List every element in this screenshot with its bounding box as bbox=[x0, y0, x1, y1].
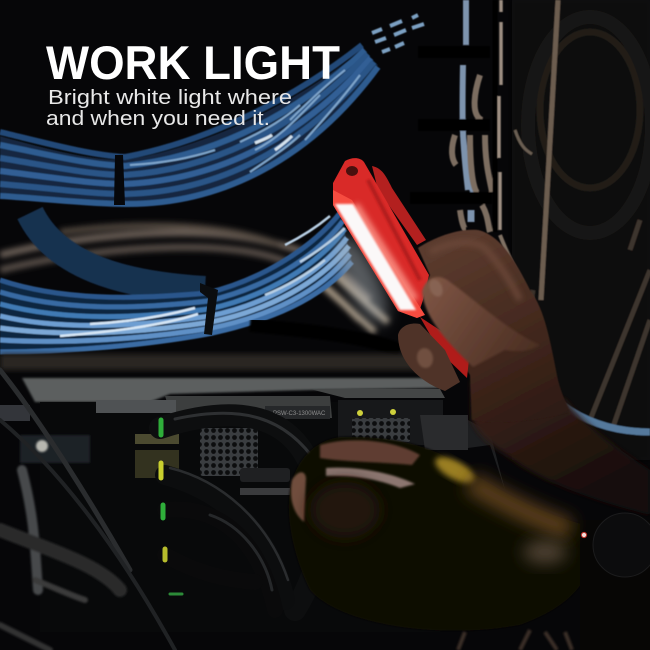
watch light bbox=[581, 532, 587, 538]
dark cable under flashlight bbox=[250, 325, 400, 350]
lit fingers bbox=[320, 440, 420, 465]
body bbox=[333, 158, 429, 318]
cable tie lower bbox=[200, 283, 218, 335]
hanging hole bbox=[346, 166, 358, 176]
thumb nail highlight bbox=[427, 277, 445, 299]
subtitle line 1: Bright white light where bbox=[48, 87, 292, 109]
gold knuckle bbox=[431, 452, 479, 488]
power unit left bbox=[165, 396, 332, 418]
forearm upper bbox=[472, 380, 650, 515]
lower hand bbox=[289, 437, 650, 650]
black cables bbox=[0, 370, 327, 650]
blurred foreground cables bbox=[0, 470, 120, 650]
shelf bbox=[0, 354, 440, 370]
power plug bbox=[420, 415, 468, 450]
upper blue cable bundle bbox=[0, 15, 424, 204]
finger highlight bbox=[430, 242, 520, 300]
index finger and back of hand bbox=[418, 230, 570, 422]
side glow bbox=[333, 190, 425, 318]
wrist and arm bbox=[580, 520, 650, 650]
work light bbox=[333, 158, 429, 318]
status leds bbox=[357, 410, 363, 416]
work light tail bbox=[420, 317, 470, 378]
server top surface bbox=[22, 378, 440, 402]
power unit label: PSW-C3-1300WAC bbox=[273, 411, 326, 417]
ridge bbox=[368, 180, 420, 280]
lower gripping fingers bbox=[398, 323, 460, 391]
server rack bbox=[0, 373, 505, 632]
plug sockets bbox=[135, 434, 179, 444]
watch bbox=[593, 513, 650, 577]
title: WORK LIGHT bbox=[46, 36, 340, 89]
beige cables behind lower bundle bbox=[0, 226, 388, 332]
hand body bbox=[289, 437, 591, 631]
server front bbox=[40, 402, 440, 632]
bottom strands bbox=[458, 630, 572, 650]
subtitle line 2: and when you need it. bbox=[46, 108, 270, 130]
thumb bbox=[422, 277, 540, 367]
background: dark equipment on right bbox=[410, 0, 650, 460]
cable tie upper bbox=[114, 155, 125, 205]
work light clip bbox=[372, 166, 426, 245]
upper hand bbox=[418, 230, 570, 422]
vents bbox=[200, 428, 258, 476]
power unit right bbox=[310, 389, 445, 398]
lower blue cable bundle bbox=[0, 213, 352, 352]
led panel bbox=[335, 204, 416, 310]
subtitle bbox=[46, 87, 292, 130]
light glow bbox=[327, 230, 397, 330]
connector rings bbox=[158, 420, 164, 435]
